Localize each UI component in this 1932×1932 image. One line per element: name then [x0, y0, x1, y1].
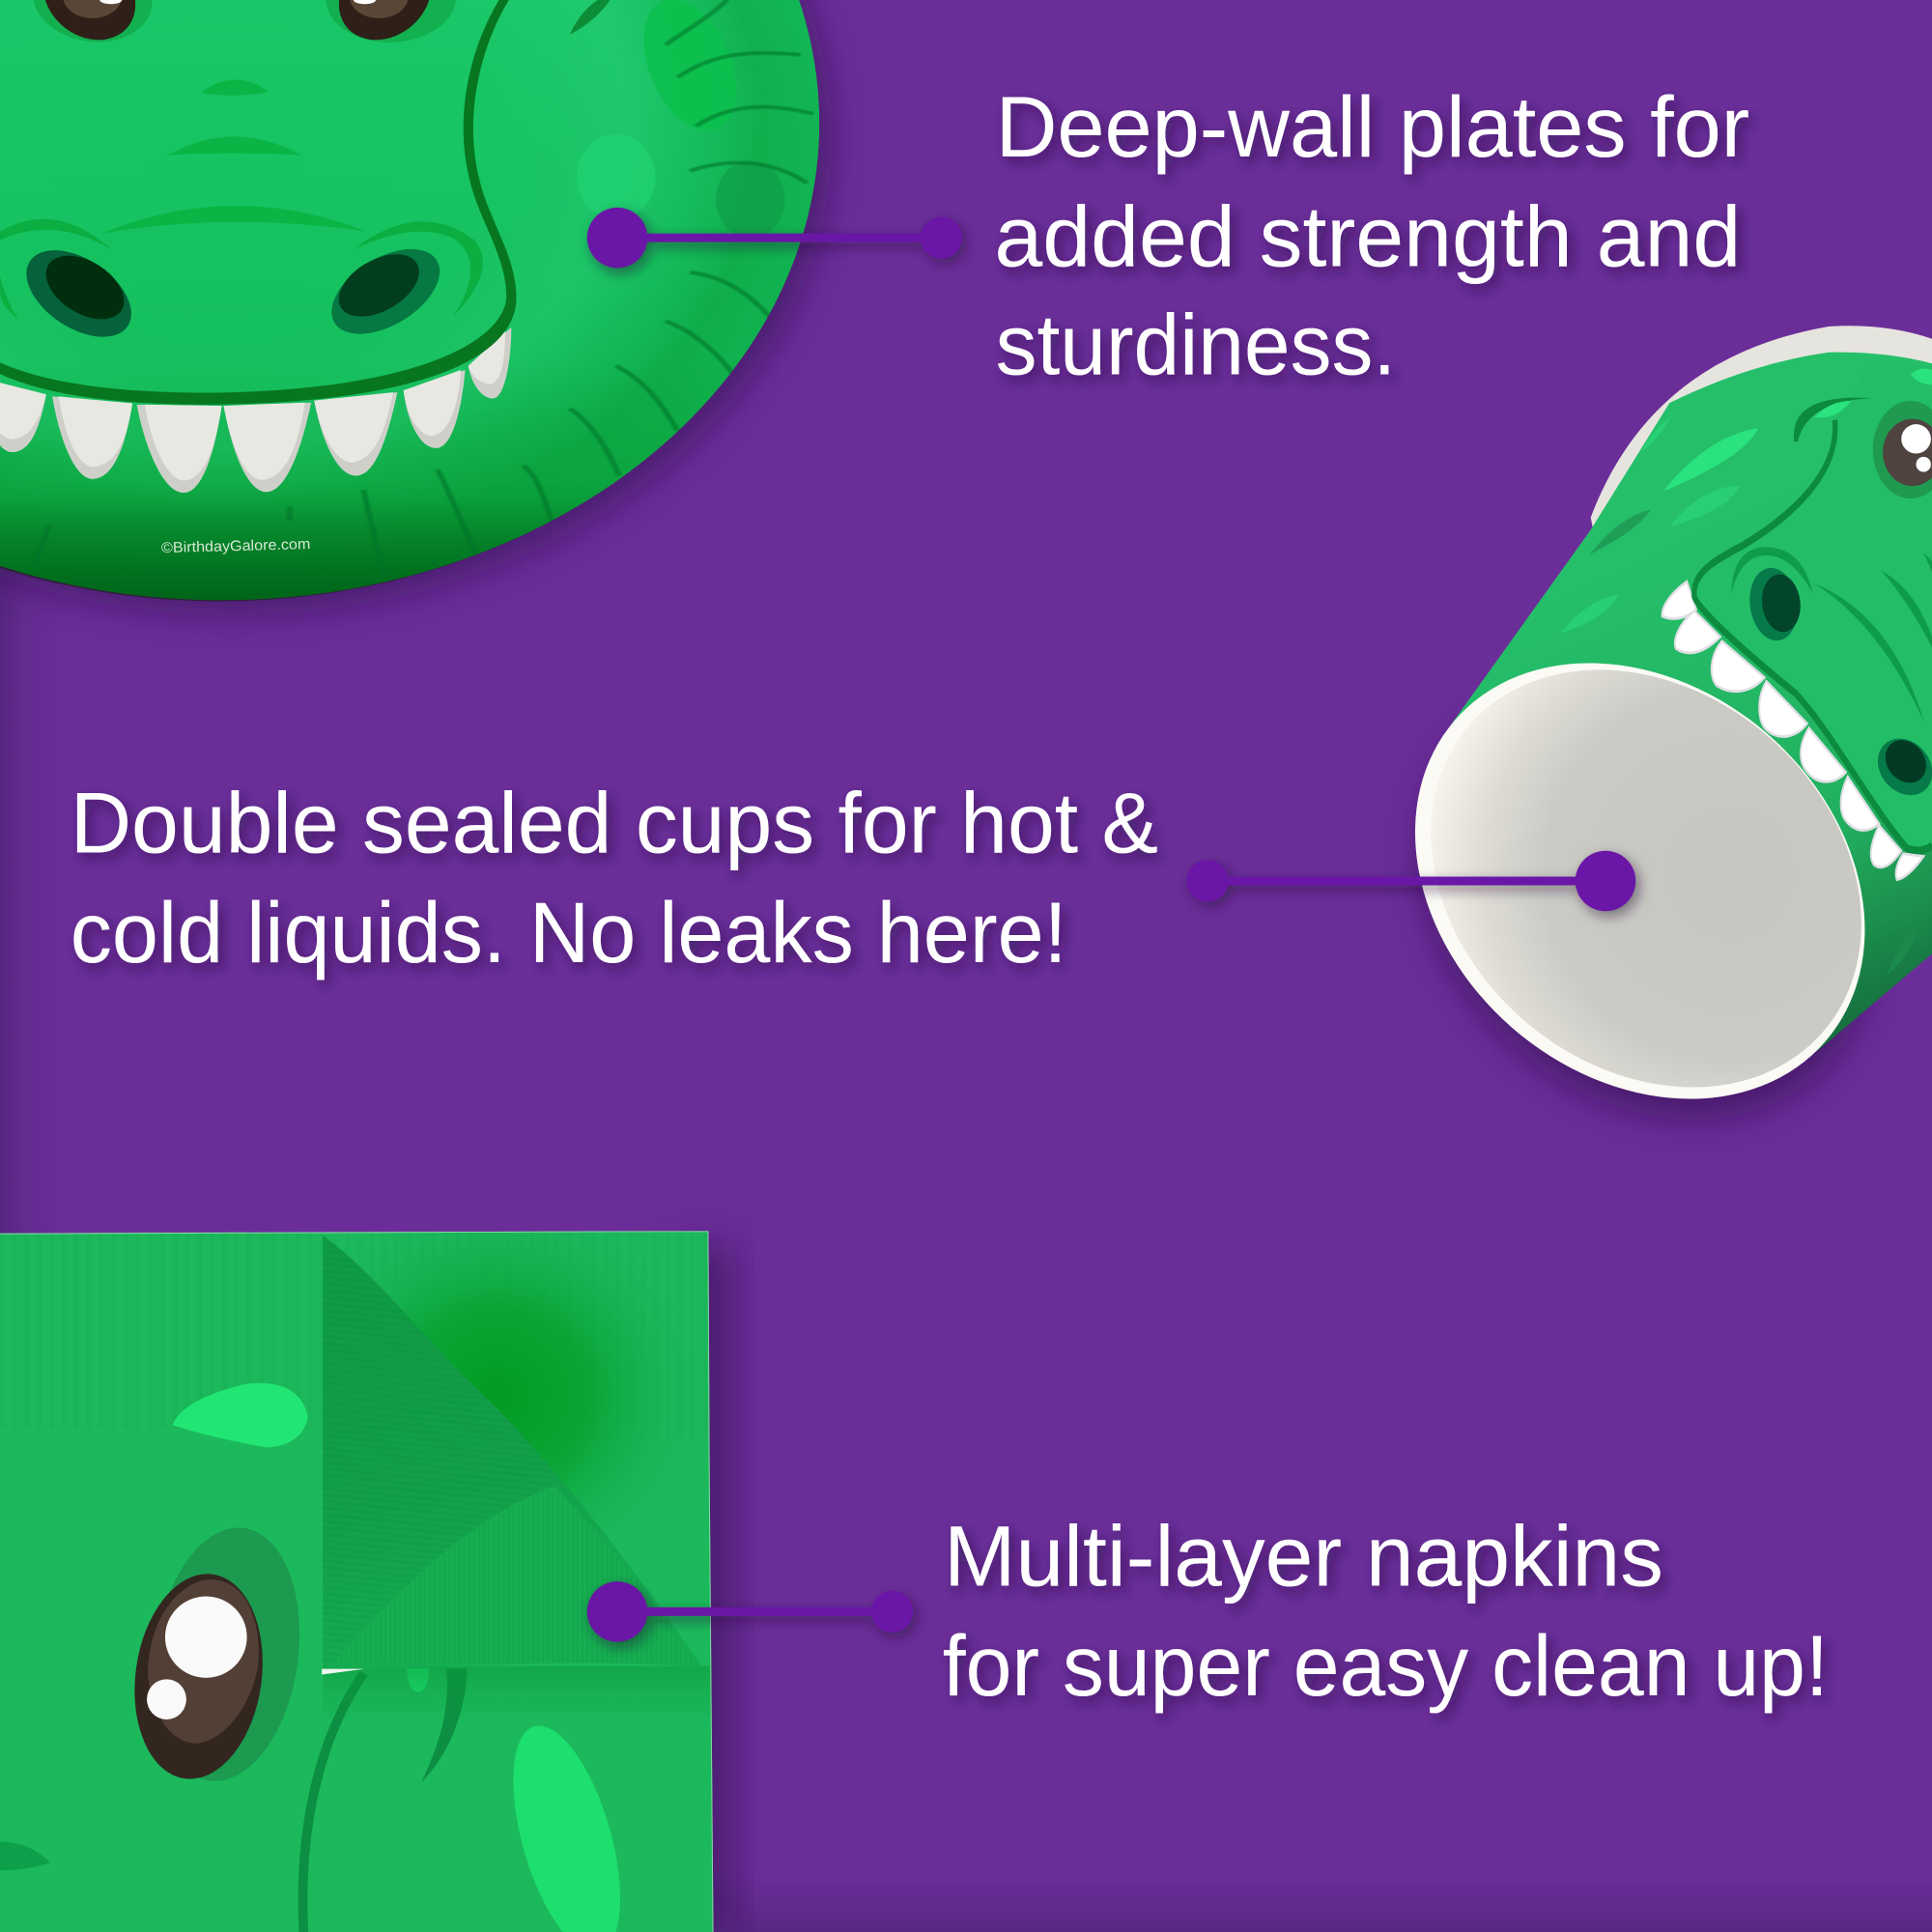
text: cups: Double sealed cups for hot & [71, 775, 1158, 871]
lower shadow [323, 1665, 711, 1698]
text: plates: sturdiness. [996, 297, 1396, 393]
eyes [14, 0, 475, 55]
cup snout fill [1694, 366, 1932, 850]
cup artwork [1560, 366, 1932, 976]
napkin artwork [0, 1233, 712, 1932]
napkin eye [134, 1528, 299, 1781]
napkin light spots [173, 1383, 641, 1932]
connector: plate [587, 208, 962, 268]
panel: cup [1327, 326, 1932, 1209]
text: cups: cold liquids. No leaks here! [71, 884, 1067, 980]
napkin edge highlight [0, 1231, 714, 1932]
connector: napkin [587, 1581, 913, 1642]
text: plates: added strength and [994, 188, 1741, 285]
snout line [0, 0, 516, 405]
cup eye [1873, 401, 1932, 498]
teeth [0, 327, 511, 493]
plate spots [570, 0, 784, 238]
cup light marks [1560, 417, 1918, 976]
text: napkins: for super easy clean up! [943, 1617, 1829, 1714]
plate shadow [0, 0, 832, 614]
napkin left mark [0, 1842, 50, 1870]
napkin shadow [671, 1244, 735, 1932]
napkin snout line [302, 1673, 364, 1932]
cup back rim [1591, 326, 1932, 529]
cup teeth [1662, 582, 1923, 880]
cup brow [1794, 398, 1872, 441]
rim ridges [34, 0, 813, 578]
cup shadow [1332, 594, 1932, 1209]
text: plates [994, 78, 1749, 393]
cup nostrils [1740, 554, 1932, 804]
cup snout marks [1731, 547, 1932, 724]
plate body [0, 0, 838, 610]
text: cups [71, 775, 1158, 980]
cup body [1450, 353, 1932, 1051]
panel: napkin [0, 1231, 735, 1932]
napkin leaf mark [421, 1668, 468, 1782]
napkin fold [322, 1236, 702, 1674]
text: plates: Deep-wall plates for [996, 78, 1749, 175]
cup brow highlight [1814, 401, 1852, 417]
napkin body [0, 1231, 715, 1932]
cup top highlight [1911, 368, 1932, 384]
plate copyright: ©BirthdayGalore.com [161, 536, 311, 556]
nostrils [0, 219, 483, 349]
cup mouth [1327, 573, 1932, 1189]
nose marks [101, 79, 367, 234]
cup snout line [1694, 420, 1932, 850]
connector: cup [1186, 851, 1635, 911]
text: napkins: Multi-layer napkins [944, 1508, 1663, 1605]
panel: plate [0, 0, 838, 614]
text: napkins [943, 1508, 1829, 1714]
crocodile face artwork [0, 0, 813, 578]
plate underside edge [0, 0, 817, 601]
napkin fold shadow [386, 1247, 653, 1513]
